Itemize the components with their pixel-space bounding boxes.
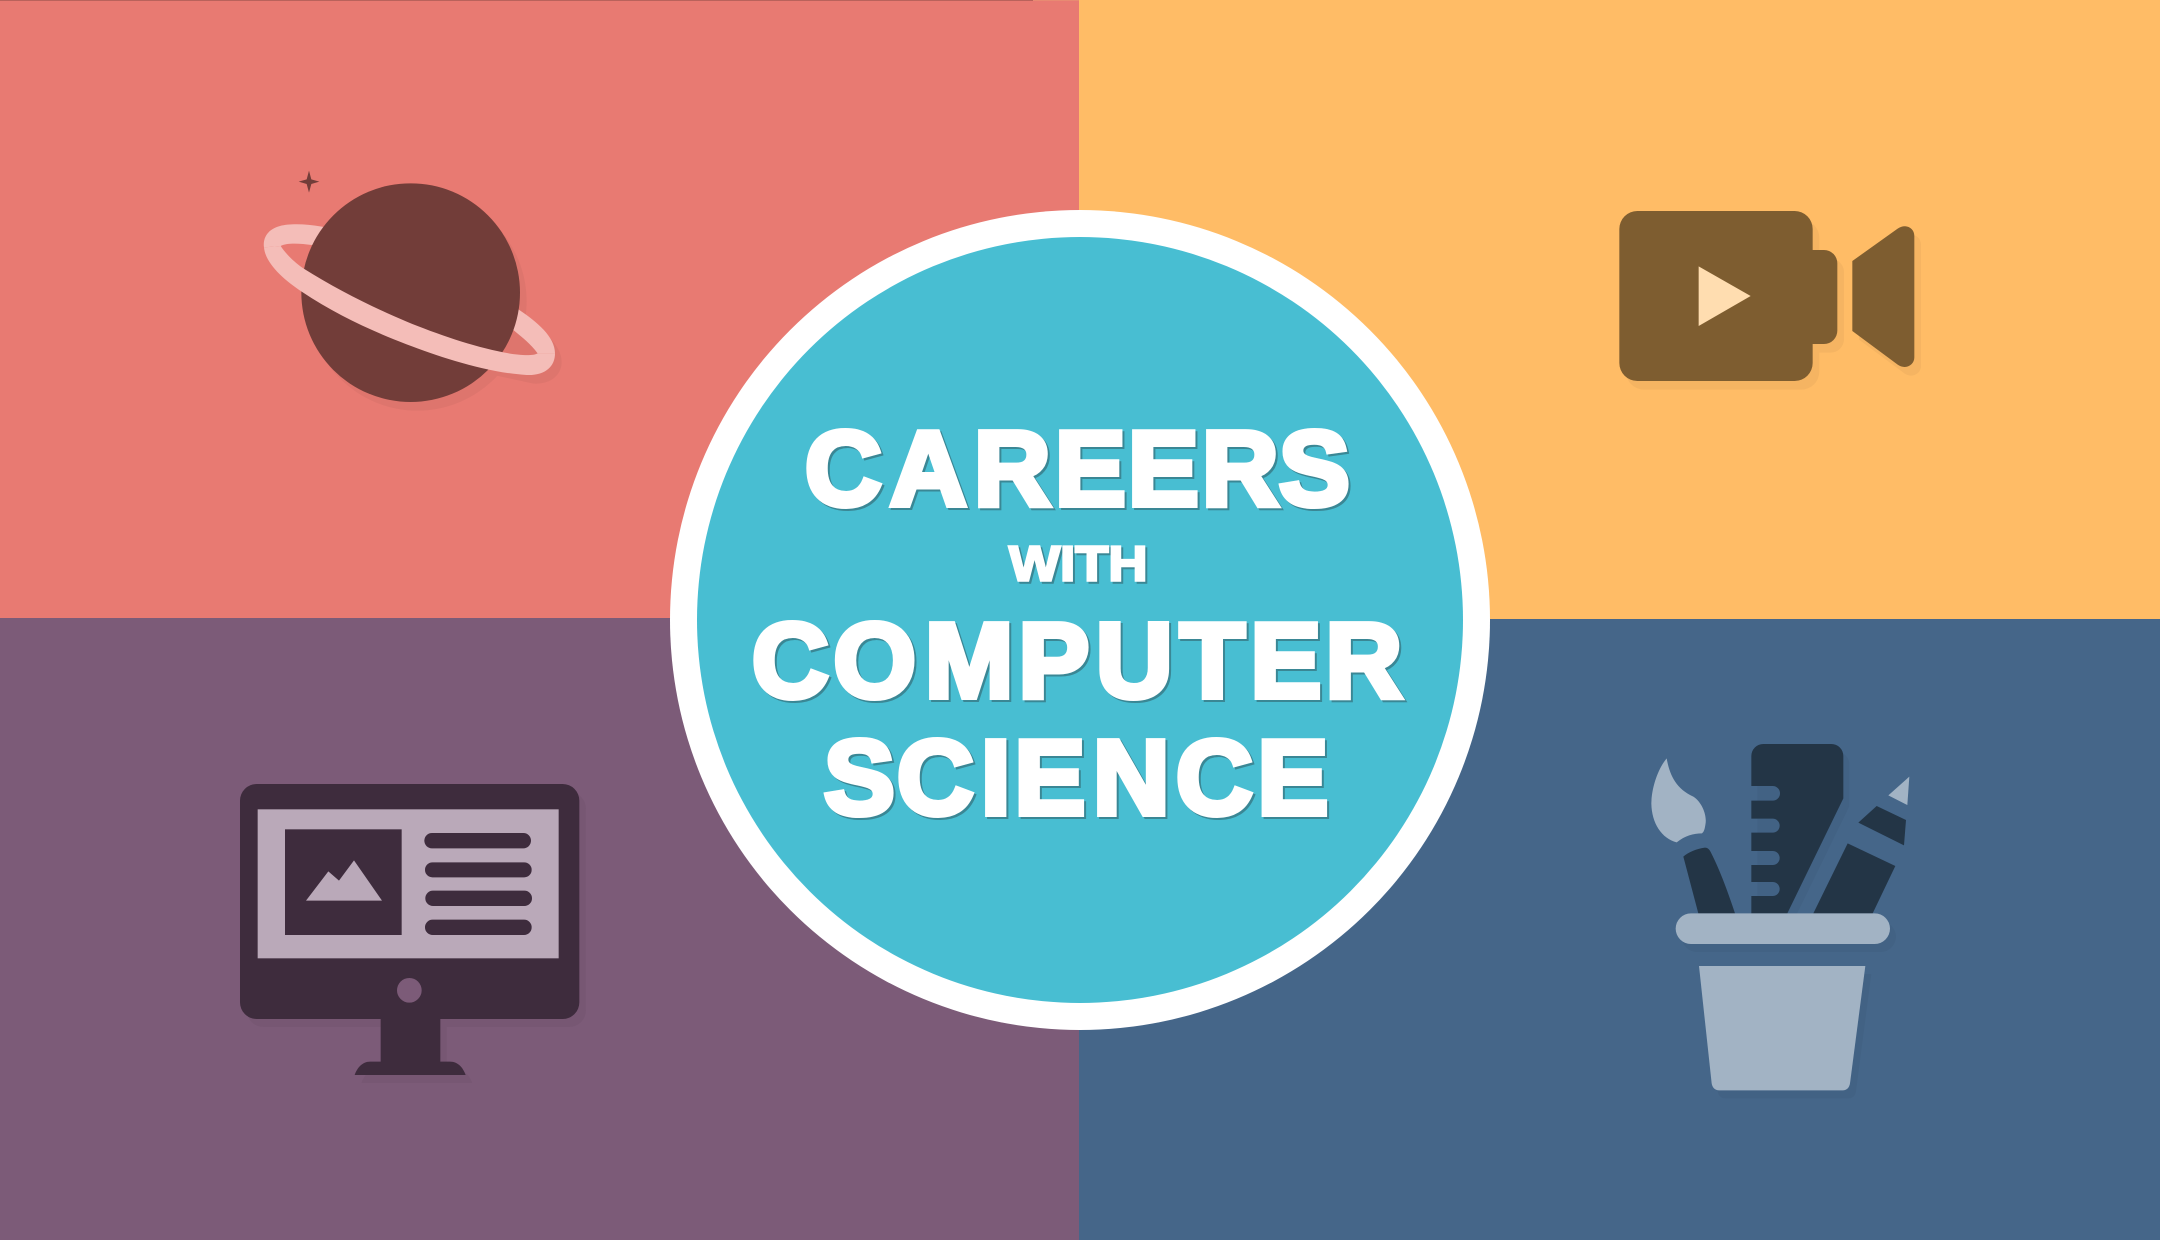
title line: with: WITH bbox=[1009, 538, 1148, 592]
ring back right bbox=[493, 297, 555, 353]
camera lens bbox=[1852, 226, 1914, 367]
white ring bbox=[670, 210, 1490, 1030]
icon: video camera bbox=[1619, 211, 1921, 390]
text line 3 bbox=[425, 891, 532, 906]
camera body bbox=[1619, 211, 1837, 381]
icon: planet with ring and star bbox=[264, 171, 562, 411]
ring front bbox=[264, 246, 555, 375]
panel: purple quadrant bbox=[0, 618, 1079, 1240]
planet shadow bbox=[308, 192, 562, 411]
monitor shadow bbox=[247, 792, 586, 1083]
title line: computer: COMPUTER bbox=[752, 602, 1402, 720]
pot rim bbox=[1676, 913, 1890, 944]
text line 2 bbox=[425, 862, 532, 877]
paintbrush bristles bbox=[1651, 758, 1706, 842]
panel: blue quadrant bbox=[1079, 619, 2160, 1240]
image placeholder bbox=[285, 829, 402, 935]
icon: desktop monitor bbox=[240, 784, 586, 1083]
camera shadow bbox=[1626, 220, 1921, 390]
play triangle bbox=[1699, 266, 1751, 326]
icon: pot of art tools bbox=[1651, 744, 1909, 1098]
tools shadow bbox=[1682, 752, 1896, 1098]
power button bbox=[397, 978, 422, 1003]
pencil band bbox=[1858, 806, 1906, 845]
text line 1 bbox=[424, 833, 531, 848]
pencil body bbox=[1813, 843, 1895, 913]
teal disc bbox=[697, 237, 1463, 1003]
text line 4 bbox=[425, 920, 532, 935]
title line: careers: CAREERS bbox=[805, 410, 1350, 528]
pencil tip bbox=[1888, 777, 1909, 805]
title line: science: SCIENCE bbox=[824, 719, 1328, 837]
pot body bbox=[1699, 966, 1865, 1090]
monitor frame and stand bbox=[240, 784, 579, 1075]
panel: orange quadrant bbox=[1079, 0, 2160, 619]
panel: red quadrant bbox=[0, 0, 1079, 618]
title bbox=[752, 410, 1402, 837]
paintbrush handle bbox=[1683, 848, 1735, 913]
ring back left bbox=[264, 224, 340, 248]
star bbox=[299, 171, 319, 193]
screen bbox=[258, 809, 559, 958]
ruler bbox=[1751, 744, 1843, 913]
central circle badge bbox=[670, 210, 1490, 1030]
mountain bbox=[306, 860, 382, 901]
planet body bbox=[301, 183, 520, 402]
